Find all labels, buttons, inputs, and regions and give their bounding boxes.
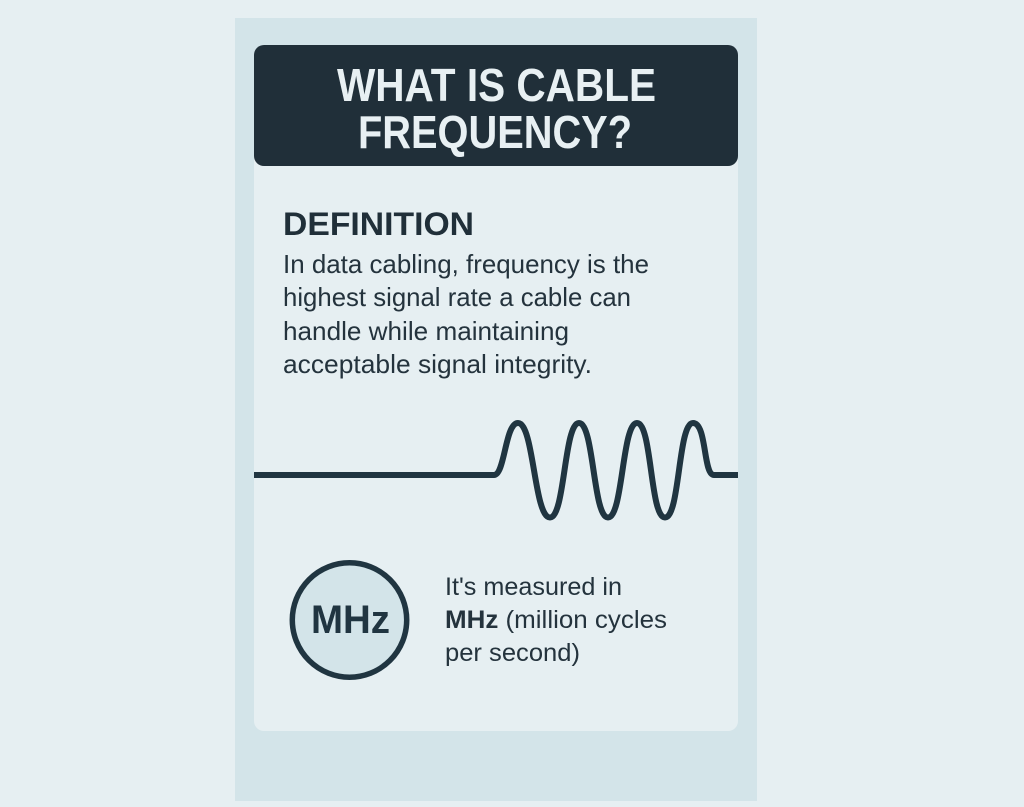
signal wave	[254, 423, 738, 518]
title banner: FREQUENCY?	[358, 106, 632, 158]
measurement text	[445, 573, 667, 667]
icon: MHz badge	[292, 563, 407, 677]
outer card	[235, 18, 757, 801]
icon: MHz badge: MHz	[311, 598, 390, 642]
definition text: In data cabling, frequency is the	[283, 249, 649, 279]
definition text: acceptable signal integrity.	[283, 349, 592, 379]
title banner: WHAT IS CABLE	[337, 59, 656, 111]
measurement text: MHz (million cycles	[445, 606, 667, 634]
definition text: highest signal rate a cable can	[283, 282, 631, 312]
inner content panel	[254, 150, 738, 731]
title banner	[254, 45, 738, 166]
measurement text: per second)	[445, 639, 580, 667]
definition text: handle while maintaining	[283, 316, 569, 346]
definition text	[283, 249, 649, 379]
definition heading: DEFINITION	[283, 206, 474, 242]
measurement text: It's measured in	[445, 573, 622, 601]
